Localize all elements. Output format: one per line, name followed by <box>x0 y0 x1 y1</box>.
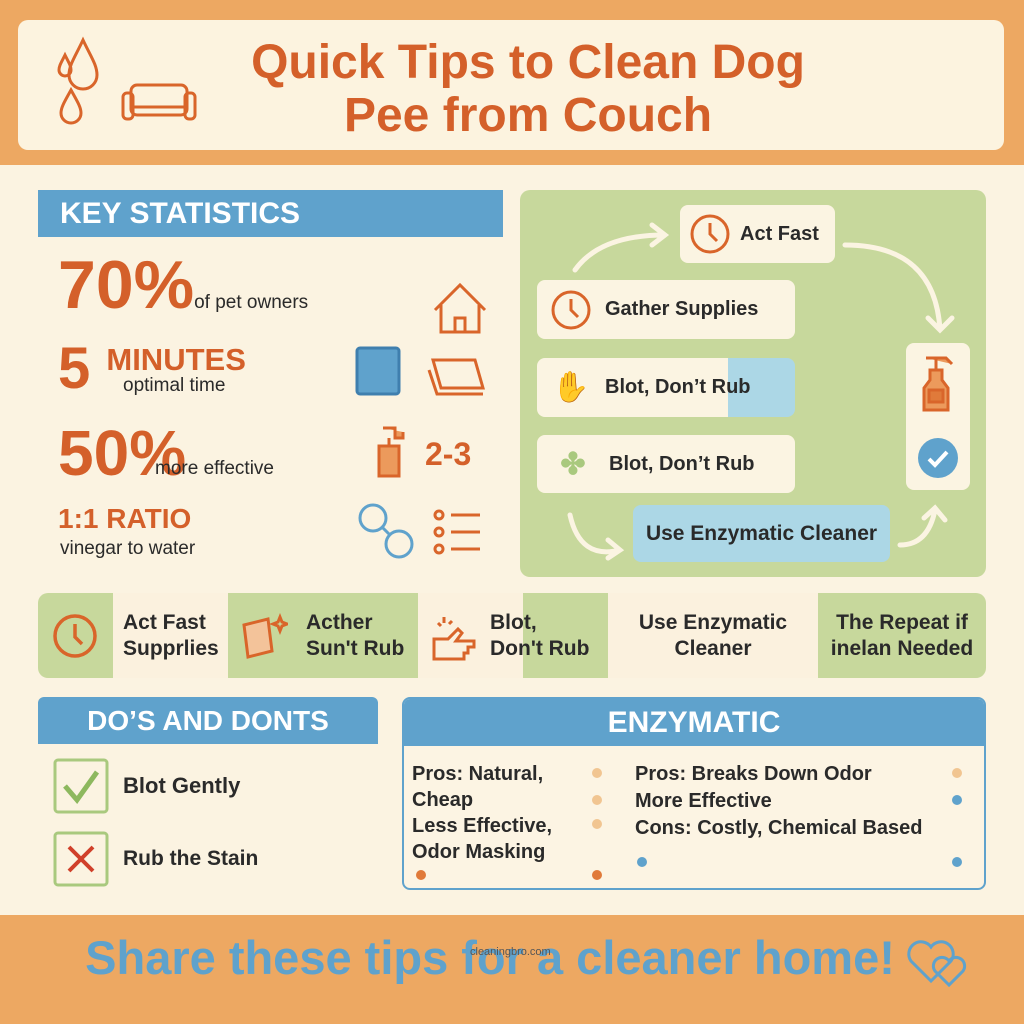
step: gather supplies: Gather Supplies <box>605 298 758 320</box>
icons: 2-3 <box>425 436 471 472</box>
stats block <box>58 247 486 559</box>
steps strip: Use Enzymatic <box>639 611 787 634</box>
enzymatic heading <box>404 699 984 746</box>
stats block: vinegar to water <box>60 538 195 559</box>
stats block: optimal time <box>123 375 225 396</box>
step: blot: ✋ <box>552 371 590 404</box>
enzymatic heading: ENZYMATIC <box>608 706 780 739</box>
key statistics heading: KEY STATISTICS <box>60 197 300 230</box>
icon: drops and couch <box>58 36 196 124</box>
title: Quick Tips to Clean Dog <box>251 36 805 89</box>
panel: enzymatic comparison: Cheap <box>412 789 473 811</box>
step: use enzymatic cleaner: Use Enzymatic Cleaner <box>646 522 877 544</box>
title <box>251 36 805 142</box>
panel: enzymatic comparison <box>402 697 986 890</box>
steps strip: Don't Rub <box>490 637 589 660</box>
stats block: more effective <box>155 458 274 479</box>
do's and donts heading: DO’S AND DONTS <box>87 705 329 736</box>
steps strip: Acther <box>306 611 373 634</box>
panel: enzymatic comparison: Pros: Breaks Down Odor <box>635 763 872 785</box>
footer text: Share these tips for a cleaner home! <box>85 931 895 984</box>
dont item: Rub the Stain <box>123 847 258 870</box>
step: blot: Blot, Don’t Rub <box>605 376 751 398</box>
dont item <box>54 832 258 886</box>
steps strip: Cleaner <box>674 637 752 660</box>
top orange band <box>0 0 1024 165</box>
strip icon: hand <box>432 617 476 660</box>
step: act fast: Act Fast <box>740 222 819 244</box>
panel: enzymatic comparison: More Effective <box>635 790 772 812</box>
panel: enzymatic comparison: Cons: Costly, Chemical Based <box>635 817 922 839</box>
do item: Blot Gently <box>123 773 240 798</box>
stat 50%: 50% <box>58 417 186 489</box>
panel: enzymatic comparison: Odor Masking <box>412 841 545 863</box>
strip icon: wipe <box>242 613 288 659</box>
stat ratio: 1:1 RATIO <box>58 503 191 534</box>
steps strip: Sun't Rub <box>306 637 404 660</box>
step: blot <box>537 358 795 417</box>
panel: enzymatic comparison: Pros: Natural, <box>412 763 543 785</box>
result box <box>906 343 970 490</box>
footer band: cleaningbro.com <box>470 946 551 958</box>
icon: hearts <box>907 940 966 987</box>
stat 70%: 70%of pet owners <box>58 247 308 323</box>
steps strip: Supprlies <box>123 637 219 660</box>
step: act fast <box>680 205 835 263</box>
step: blot 2: ✤ <box>560 448 586 480</box>
do's and donts heading <box>38 697 378 744</box>
steps strip: inelan Needed <box>831 637 973 660</box>
do item <box>54 758 240 814</box>
steps strip: Blot, <box>490 611 537 634</box>
step: use enzymatic cleaner <box>633 505 890 562</box>
footer band <box>0 915 1024 1024</box>
arrows <box>568 222 954 560</box>
step: gather supplies <box>537 280 795 339</box>
step: blot 2 <box>537 435 795 493</box>
step: blot 2: Blot, Don’t Rub <box>609 452 755 474</box>
stat 5 minutes: 5 MINUTES <box>58 336 246 401</box>
panel: process flow <box>520 190 986 577</box>
header card <box>18 20 1004 150</box>
panel: enzymatic comparison: Less Effective, <box>412 815 552 837</box>
strip icon: clock <box>53 614 97 658</box>
steps strip <box>38 593 986 678</box>
title: Pee from Couch <box>344 89 712 142</box>
steps strip: Act Fast <box>123 611 206 634</box>
key statistics heading <box>38 190 503 237</box>
steps strip: The Repeat if <box>836 611 968 634</box>
icons <box>356 283 486 558</box>
